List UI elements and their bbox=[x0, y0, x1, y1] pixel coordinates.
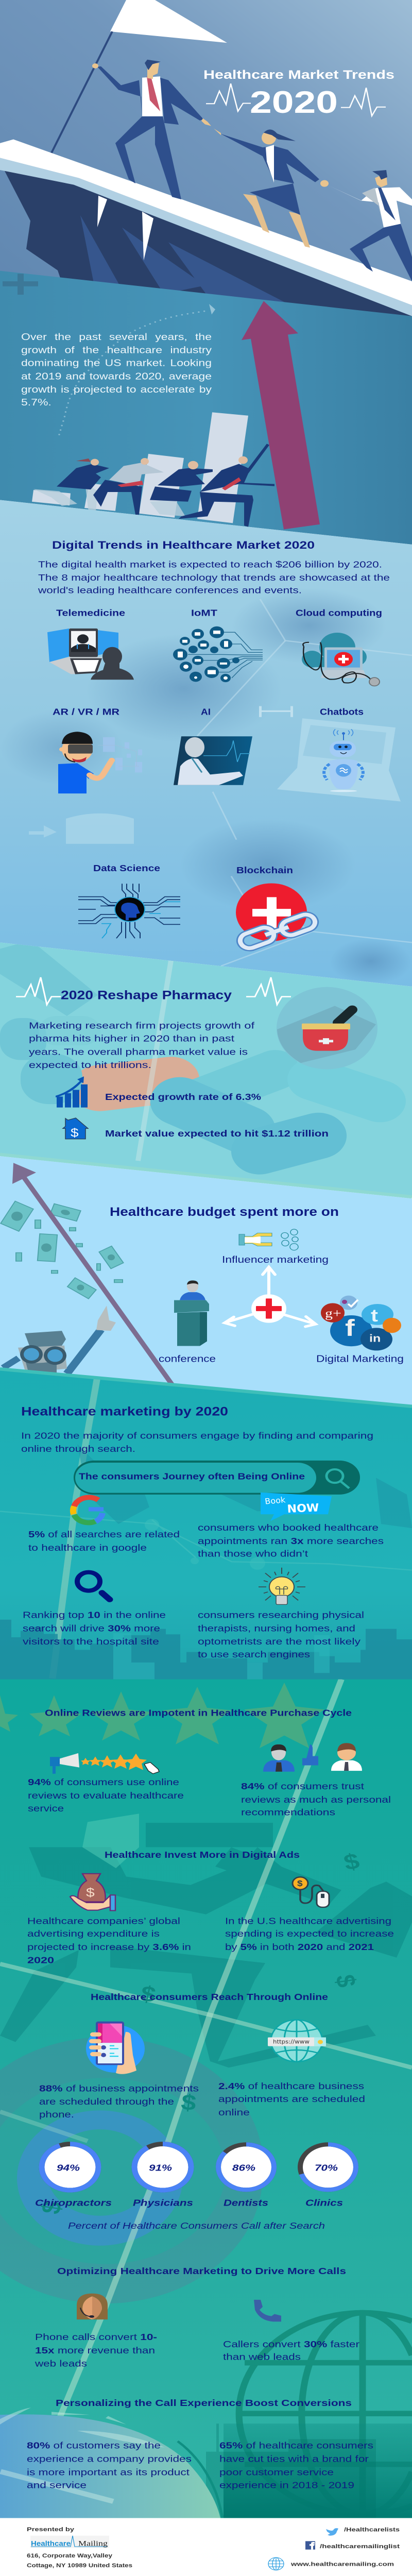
text block: pharmacy growth bbox=[29, 1021, 255, 1070]
icon: AR VR person bbox=[58, 732, 142, 793]
panel: hero climbing illustration bbox=[0, 0, 412, 332]
text block: intro paragraph: growth is projected to accelerate by bbox=[21, 384, 212, 395]
icon: social media bubbles: in bbox=[369, 1332, 381, 1344]
search bar: consumer journey bbox=[74, 1461, 360, 1495]
icon: twitter bird bbox=[326, 2528, 338, 2536]
stat: market value: Market value expected to hit $1.12 trillion bbox=[105, 1129, 329, 1139]
chart labels: provider types: Physicians bbox=[133, 2198, 193, 2208]
panel: digital trends bbox=[0, 500, 412, 987]
text block: intro paragraph: Over the past several years, the bbox=[21, 331, 212, 342]
label: chatbots: Chatbots bbox=[320, 707, 364, 717]
text block: 5% of searches bbox=[28, 1530, 180, 1553]
icon: house with dollar: $ bbox=[71, 1127, 79, 1140]
label: data science: Data Science bbox=[93, 864, 160, 873]
label: blockchain: Blockchain bbox=[236, 866, 293, 875]
label: AI: AI bbox=[201, 707, 211, 717]
chart labels: provider types: Dentists bbox=[224, 2198, 268, 2208]
text block: consumers researching: therapists, nursing homes, and bbox=[198, 1623, 355, 1634]
illustration: man with binoculars bbox=[3, 1306, 116, 1374]
text block: 84% of consumers bbox=[241, 1782, 391, 1818]
heading: 2020: 2020 bbox=[250, 86, 338, 120]
label: digital marketing: Digital Marketing bbox=[316, 1353, 404, 1364]
text block: 88% phone: 88% of business appointments bbox=[39, 2083, 199, 2094]
chart labels: provider types bbox=[35, 2198, 343, 2208]
chart: rising bars bbox=[32, 412, 248, 523]
illustration: rock and ice slope bbox=[0, 140, 412, 332]
text block: pharmacy growth: years. The overall pharma market value is bbox=[29, 1047, 248, 1057]
icon: social media bubbles: f bbox=[345, 1315, 355, 1341]
illustration: lead businessman bbox=[92, 60, 211, 199]
panel: healthcare marketing by 2020 bbox=[0, 1368, 412, 1679]
icon: light bulb bbox=[259, 1568, 305, 1604]
text block: intro paragraph: growth of the healthcare industry bbox=[21, 344, 212, 355]
icon: social media bubbles: t bbox=[371, 1306, 378, 1326]
text block: 65% of healthcare consumers bbox=[219, 2441, 373, 2490]
text block: callers convert: than web leads bbox=[223, 2352, 301, 2362]
text block: marketing intro: online through search. bbox=[21, 1444, 135, 1454]
text block: phone calls convert bbox=[35, 2332, 157, 2369]
icon: data science brain circuit bbox=[78, 884, 180, 938]
label: influencer marketing: Influencer marketing bbox=[222, 1255, 329, 1265]
text block: 2.4% online: online bbox=[218, 2108, 250, 2118]
text block: ranking top 10: search will drive 30% more bbox=[23, 1623, 160, 1634]
heading: healthcare market trends: Healthcare Market Trends bbox=[203, 68, 394, 82]
icon: conference podium speaker bbox=[174, 1280, 209, 1346]
text: presented by: Presented by bbox=[27, 2526, 74, 2532]
logo: healthcare mailing: Mailing bbox=[78, 2539, 108, 2548]
icon: title heartbeat right bbox=[341, 88, 386, 116]
icon: call agent bbox=[77, 2294, 108, 2319]
text block: 2.4% online: appointments are scheduled bbox=[218, 2094, 365, 2104]
text block: consumers researching: consumers researching physical bbox=[198, 1610, 364, 1620]
text block: 2.4% online: 2.4% of healthcare business bbox=[218, 2081, 364, 2091]
text block: 3x more searches bbox=[198, 1523, 384, 1559]
heading: optimizing marketing: Optimizing Healthcare Marketing to Drive More Calls bbox=[57, 2267, 346, 2277]
illustration: third climber bbox=[329, 170, 412, 281]
icon: white flag on pole bbox=[52, 0, 227, 153]
panel: hero title bbox=[203, 68, 394, 120]
heading: consumers reach online: Healthcare consumers Reach Through Online bbox=[91, 1993, 328, 2002]
icon: dollar mouse bbox=[293, 1877, 329, 1907]
text block: 94% of consumers: 94% of consumers use online bbox=[28, 1777, 179, 1787]
icon: AI robot doctor bbox=[174, 736, 252, 785]
text block: global ad expenditure: Healthcare companies’ global bbox=[27, 1916, 180, 1926]
text block: digital trends intro bbox=[38, 560, 390, 596]
icon: money bag in hand: $ bbox=[86, 1885, 95, 1900]
text block: consumers researching bbox=[198, 1610, 364, 1660]
text block: intro paragraph bbox=[21, 330, 213, 410]
icon: phone handset bbox=[254, 2300, 281, 2321]
label: AR VR MR: AR / VR / MR bbox=[53, 707, 119, 717]
text block: marketing intro bbox=[21, 1431, 373, 1454]
text block: pharmacy growth: expected to hit trillions. bbox=[29, 1060, 151, 1070]
text block: global ad expenditure bbox=[27, 1916, 191, 1965]
text block: US ad spending: spending is expected to increase bbox=[225, 1929, 394, 1939]
text block: consumers researching: optometrists are the most likely bbox=[198, 1637, 360, 1647]
text: address: Cottage, NY 10989 United States bbox=[27, 2562, 132, 2569]
text block: 94% of consumers: service bbox=[28, 1804, 64, 1814]
text: address: 616, Corporate Way,Valley bbox=[27, 2552, 112, 2559]
chart: chiropractors 94% donut: 94% bbox=[57, 2163, 80, 2173]
logo: healthcare mailing: Healthcare bbox=[31, 2540, 71, 2548]
heading: budget: Healthcare budget spent more on bbox=[110, 1205, 339, 1218]
text: website: www.healthcaremailing.com bbox=[290, 2561, 394, 2567]
icon: faint plus sign bbox=[3, 274, 38, 295]
text block: digital trends intro: The 8 major healthcare technology that trends are showcased at the bbox=[38, 573, 390, 583]
stat: expected growth rate: Expected growth rate of 6.3% bbox=[105, 1092, 261, 1102]
icon: magnifier bbox=[77, 1572, 110, 1600]
chart: chiropractors 94% donut bbox=[42, 2144, 98, 2190]
chart: physicians 91% donut bbox=[134, 2144, 191, 2190]
text block: consumers researching: to use search engines bbox=[198, 1650, 310, 1660]
heading: marketing: Healthcare marketing by 2020 bbox=[21, 1404, 228, 1418]
panel: 2020 reshape pharmacy bbox=[0, 940, 412, 1197]
text block: intro paragraph: at 2019 and towards 2020, average bbox=[21, 370, 212, 381]
icon: telemedicine bbox=[47, 629, 134, 680]
icons: stars background bbox=[0, 1683, 324, 1748]
icon: blockchain medical chain bbox=[236, 883, 318, 951]
text: address bbox=[27, 2552, 132, 2569]
chart: clinics 70% donut bbox=[300, 2144, 356, 2190]
text block: 5% of searches: to healthcare in google bbox=[28, 1543, 147, 1553]
icons: dollar signs background: $ bbox=[180, 2090, 198, 2115]
panel: lower teal background bbox=[0, 1679, 412, 2518]
icon: dotted growth curve bbox=[59, 304, 215, 434]
heading: 2020 reshape pharmacy: 2020 Reshape Pharmacy bbox=[61, 988, 232, 1002]
icon: facebook bbox=[305, 2541, 315, 2550]
text block: phone calls convert: 15x more revenue than bbox=[35, 2346, 155, 2356]
icons: dollar signs background: $ bbox=[341, 1849, 362, 1875]
icon: center plus with three arrows bbox=[225, 1267, 316, 1327]
icon: dollar mouse: $ bbox=[297, 1879, 303, 1888]
text block: marketing intro: In 2020 the majority of consumers engage by finding and comparing bbox=[21, 1431, 373, 1441]
icons: dollar signs background: $ bbox=[330, 1973, 362, 1989]
search bar: consumer journey: The consumers Journey often Being Online bbox=[79, 1471, 305, 1482]
icons: dollar signs background: $ bbox=[138, 1981, 158, 2008]
heading: digital ads: Healthcare Invest More in Digital Ads bbox=[105, 1850, 300, 1860]
icons: dollar signs background bbox=[36, 1849, 362, 2216]
icon: book now bubble: NOW bbox=[287, 1501, 319, 1515]
heading: online reviews: Online Reviews are Impotent in Healthcare Purchase Cycle bbox=[45, 1708, 352, 1718]
text block: 65% of healthcare consumers: 65% of healthcare consumers bbox=[219, 2441, 373, 2451]
icon: left heartbeat line bbox=[16, 977, 61, 1005]
icon: house with dollar bbox=[63, 1118, 88, 1140]
text block: phone calls convert: web leads bbox=[35, 2359, 87, 2369]
icon: people with thumbs up bbox=[263, 1743, 362, 1772]
text block: 80% of customers: experience a company provides bbox=[27, 2454, 192, 2464]
heading: digital trends: Digital Trends in Healthcare Market 2020 bbox=[52, 539, 315, 551]
panel: healthcare budget bbox=[0, 1156, 412, 1405]
icon: social media bubbles bbox=[321, 1296, 401, 1350]
text block: 65% of healthcare consumers: have cut ties with a brand for bbox=[219, 2454, 369, 2464]
text: facebook handle: /healthcaremailinglist bbox=[320, 2543, 400, 2550]
text block: 80% of customers: 80% of customers say the bbox=[27, 2441, 161, 2451]
text block: 84% of consumers: 84% of consumers trust bbox=[241, 1782, 364, 1791]
text block: ranking top 10: Ranking top 10 in the online bbox=[23, 1610, 166, 1620]
caption: percent after search: Percent of Healthcare Consumers Call after Search bbox=[68, 2221, 325, 2231]
icon: social media bubbles: g+ bbox=[325, 1307, 341, 1320]
label: conference: conference bbox=[159, 1353, 216, 1364]
text block: global ad expenditure: projected to increase by 3.6% in bbox=[27, 1942, 191, 1953]
icon: chatbot bbox=[324, 729, 363, 792]
icon: book now bubble bbox=[261, 1493, 332, 1521]
text block: 5% of searches: 5% of all searches are related bbox=[28, 1530, 180, 1539]
illustration: businesswoman bbox=[214, 128, 329, 248]
text block: US ad spending: In the U.S healthcare advertising bbox=[225, 1916, 391, 1926]
text block: 88% phone: phone. bbox=[39, 2110, 74, 2120]
icon: phone in hand bbox=[86, 2022, 145, 2074]
text: twitter handle: /Healthcarelists bbox=[344, 2527, 400, 2533]
text block: phone calls convert: Phone calls convert 10- bbox=[35, 2332, 157, 2343]
icon: title heartbeat left bbox=[206, 83, 251, 111]
heading: personalizing call experience: Personalizing the Call Experience Boost Conversions bbox=[56, 2399, 352, 2408]
icon: cloud computing laptop bbox=[302, 633, 380, 686]
text block: 84% of consumers: recommendations bbox=[241, 1807, 335, 1818]
text block: 80% of customers: is more important as its product bbox=[27, 2467, 190, 2478]
text block: 84% of consumers: reviews as much as personal bbox=[241, 1795, 391, 1805]
text block: 3x more searches: consumers who booked healthcare bbox=[198, 1523, 379, 1533]
illustration: money bills bbox=[1, 1201, 124, 1299]
text block: 65% of healthcare consumers: experience in 2018 - 2019 bbox=[219, 2481, 354, 2490]
icon: money bag in hand bbox=[70, 1874, 115, 1910]
chart: physicians 91% donut: 91% bbox=[149, 2163, 172, 2173]
text block: ranking top 10 bbox=[23, 1610, 166, 1647]
label: cloud computing: Cloud computing bbox=[296, 608, 382, 618]
icon: megaphone with stars bbox=[50, 1753, 159, 1774]
icon: globe with URL: https://www bbox=[273, 2039, 310, 2045]
text block: global ad expenditure: 2020 bbox=[27, 1955, 54, 1965]
arrow: rising trend arrow bbox=[12, 1163, 174, 1386]
text block: intro paragraph: dominating the US market. Looking bbox=[21, 358, 212, 368]
text block: digital trends intro: world's leading healthcare conferences and events. bbox=[38, 585, 302, 596]
text block: 2.4% online bbox=[218, 2081, 365, 2118]
text block: 80% of customers bbox=[27, 2441, 192, 2490]
text block: ranking top 10: visitors to the hospital site bbox=[23, 1637, 159, 1647]
icon: mortar and pestle bbox=[277, 987, 377, 1069]
icon: right heartbeat line bbox=[246, 977, 291, 1005]
panel: footer bbox=[0, 2518, 412, 2576]
panel: intro teal section bbox=[0, 271, 412, 545]
icon: globe bbox=[268, 2557, 284, 2570]
logo: healthcare mailing bbox=[30, 2536, 109, 2548]
icons: dollar signs background: $ bbox=[36, 2199, 68, 2216]
text block: 94% of consumers: reviews to evaluate healthcare bbox=[28, 1791, 184, 1801]
icon: growth chart bbox=[56, 1076, 88, 1108]
text block: callers convert bbox=[223, 2340, 359, 2362]
text block: callers convert: Callers convert 30% faster bbox=[223, 2340, 359, 2349]
icon: globe with URL bbox=[268, 2019, 326, 2062]
text block: US ad spending bbox=[225, 1916, 394, 1953]
chart labels: provider types: Clinics bbox=[305, 2198, 343, 2208]
text block: 3x more searches: than those who didn’t bbox=[198, 1549, 308, 1559]
text block: digital trends intro: The digital health market is expected to reach $206 billion by 2020. bbox=[38, 560, 382, 570]
icon: google G bbox=[73, 1497, 104, 1523]
text block: intro paragraph: 5.7%. bbox=[21, 397, 52, 408]
text block: 88% phone: are scheduled through the bbox=[39, 2097, 174, 2107]
chart: clinics 70% donut: 70% bbox=[315, 2163, 338, 2173]
label: IoMT: IoMT bbox=[191, 608, 217, 618]
text block: 88% phone bbox=[39, 2083, 199, 2120]
text block: 80% of customers: and service bbox=[27, 2481, 87, 2490]
text block: US ad spending: by 5% in both 2020 and 2021 bbox=[225, 1942, 374, 1953]
chart: dentists 86% donut bbox=[218, 2144, 274, 2190]
text block: 3x more searches: appointments ran 3x more searches bbox=[198, 1536, 384, 1547]
text block: 65% of healthcare consumers: poor customer service bbox=[219, 2467, 334, 2478]
text block: pharmacy growth: Marketing research firm projects growth of bbox=[29, 1021, 255, 1031]
icon: IoMT network bbox=[173, 626, 263, 682]
label: telemedicine: Telemedicine bbox=[56, 608, 125, 618]
chart: dentists 86% donut: 86% bbox=[232, 2163, 255, 2173]
illustration: team pushing the arrow bbox=[33, 444, 274, 527]
icon: influencer magnet bbox=[239, 1229, 298, 1250]
icon: book now bubble: Book bbox=[264, 1496, 286, 1506]
chart labels: provider types: Chiropractors bbox=[35, 2198, 112, 2208]
text block: global ad expenditure: advertising expenditure is bbox=[27, 1929, 160, 1939]
arrow: maroon upward arrow bbox=[242, 301, 320, 530]
text block: pharmacy growth: pharma hits higher in 2020 than in past bbox=[29, 1033, 234, 1044]
text block: 94% of consumers bbox=[28, 1777, 184, 1814]
